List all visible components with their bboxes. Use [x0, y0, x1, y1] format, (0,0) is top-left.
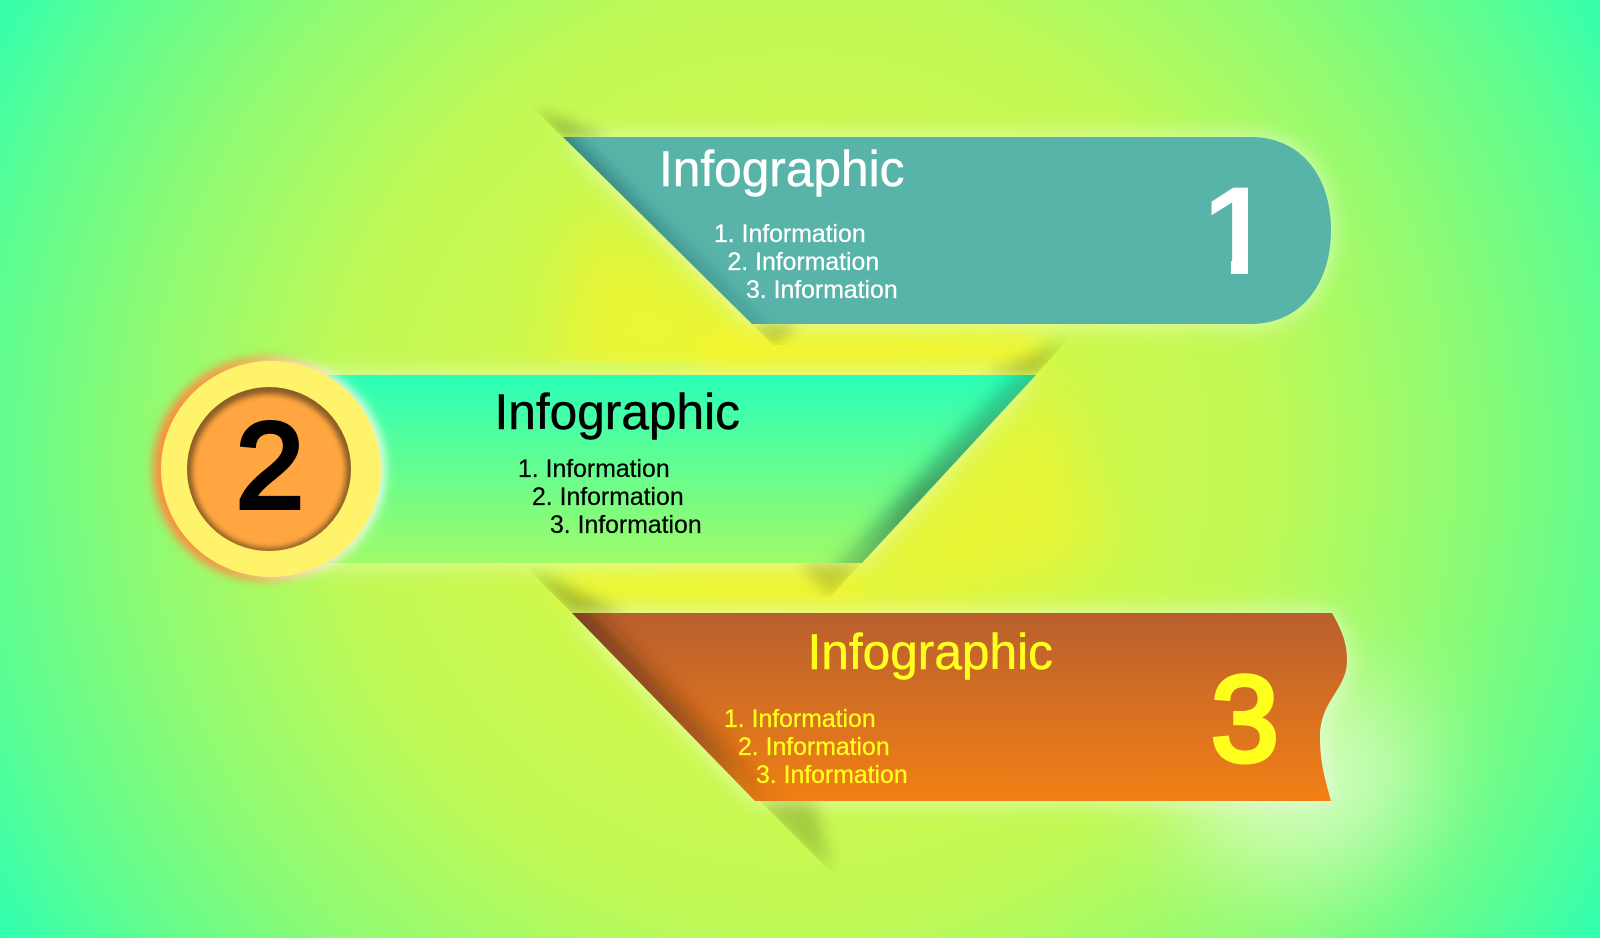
panel 1 list: 2. Information	[728, 249, 879, 276]
panel 1 heading: Infographic	[659, 141, 904, 197]
panel 1 list: 3. Information	[746, 277, 898, 304]
panel 3 list	[724, 706, 908, 789]
panel 1 number: 1	[1203, 162, 1273, 301]
panel 2 list: 2. Information	[532, 484, 684, 511]
panel 2 list: 3. Information	[550, 512, 702, 539]
panel 2 list: 1. Information	[518, 456, 670, 483]
panel 3 list: 2. Information	[738, 734, 890, 761]
panel 3 list: 3. Information	[756, 762, 908, 789]
panel 2: green banner	[300, 342, 1066, 597]
panel 2 list	[518, 456, 702, 539]
panel 3: orange banner	[530, 571, 1347, 872]
panel 1 list	[714, 221, 898, 304]
panel 1: teal banner	[535, 110, 1331, 347]
panel 3 number: 3	[1211, 651, 1279, 787]
panel 3 list: 1. Information	[724, 706, 876, 733]
panel 1 list: 1. Information	[714, 221, 866, 248]
panel 3 heading: Infographic	[808, 624, 1053, 680]
badge: number 2 circle	[153, 358, 386, 580]
panel 2 heading: Infographic	[494, 384, 740, 440]
number 2: 2	[236, 398, 304, 534]
